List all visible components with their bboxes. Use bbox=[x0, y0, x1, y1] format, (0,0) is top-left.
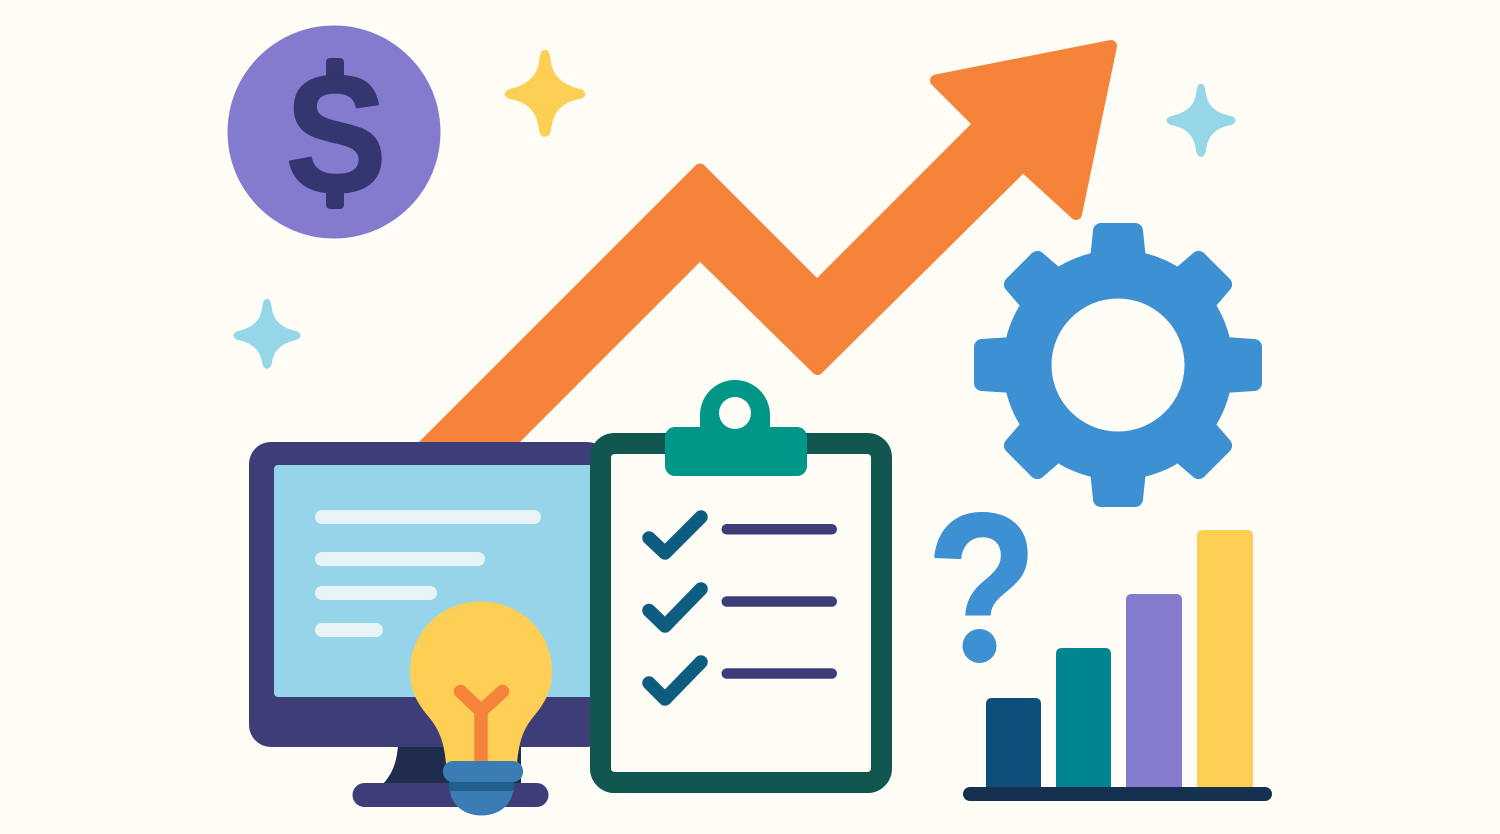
icon: clipboard checklist bbox=[600, 380, 882, 782]
monitor base bbox=[352, 783, 548, 807]
bar 2 bbox=[1056, 648, 1111, 790]
monitor screen bbox=[274, 465, 604, 697]
icon: blue sparkle left bbox=[234, 299, 300, 369]
screen text lines bbox=[315, 510, 541, 637]
icon: question mark: ? bbox=[927, 471, 1037, 704]
monitor frame bbox=[249, 442, 609, 747]
checklist row 2 bbox=[649, 589, 837, 626]
icon: gear bbox=[982, 231, 1254, 499]
bulb cap bbox=[450, 791, 513, 816]
icon: light bulb bbox=[410, 602, 552, 816]
bar 1 bbox=[986, 698, 1041, 790]
bar 4 bbox=[1197, 530, 1253, 790]
chart baseline bbox=[963, 787, 1272, 801]
infographic illustration bbox=[228, 26, 1272, 816]
bulb filament bbox=[460, 692, 502, 763]
bar chart bbox=[963, 530, 1272, 801]
icon: desktop monitor bbox=[249, 442, 609, 807]
monitor stand bbox=[382, 745, 521, 785]
bulb neck band bbox=[449, 780, 514, 792]
arrow: rising orange trend bbox=[420, 46, 1111, 450]
clipboard board bbox=[600, 444, 882, 782]
icon: dollar coin bbox=[228, 26, 440, 238]
icon: question mark bbox=[934, 512, 1028, 663]
clipboard clip bbox=[665, 380, 807, 476]
icon: blue sparkle top right bbox=[1166, 84, 1236, 157]
bar 3 bbox=[1126, 594, 1182, 790]
bulb glass bbox=[410, 602, 552, 764]
checklist row 1 bbox=[649, 517, 837, 553]
checklist row 3 bbox=[649, 662, 837, 699]
icon: yellow sparkle bbox=[505, 50, 585, 137]
bulb collar bbox=[443, 761, 523, 782]
icon: dollar coin: S bbox=[285, 41, 387, 226]
